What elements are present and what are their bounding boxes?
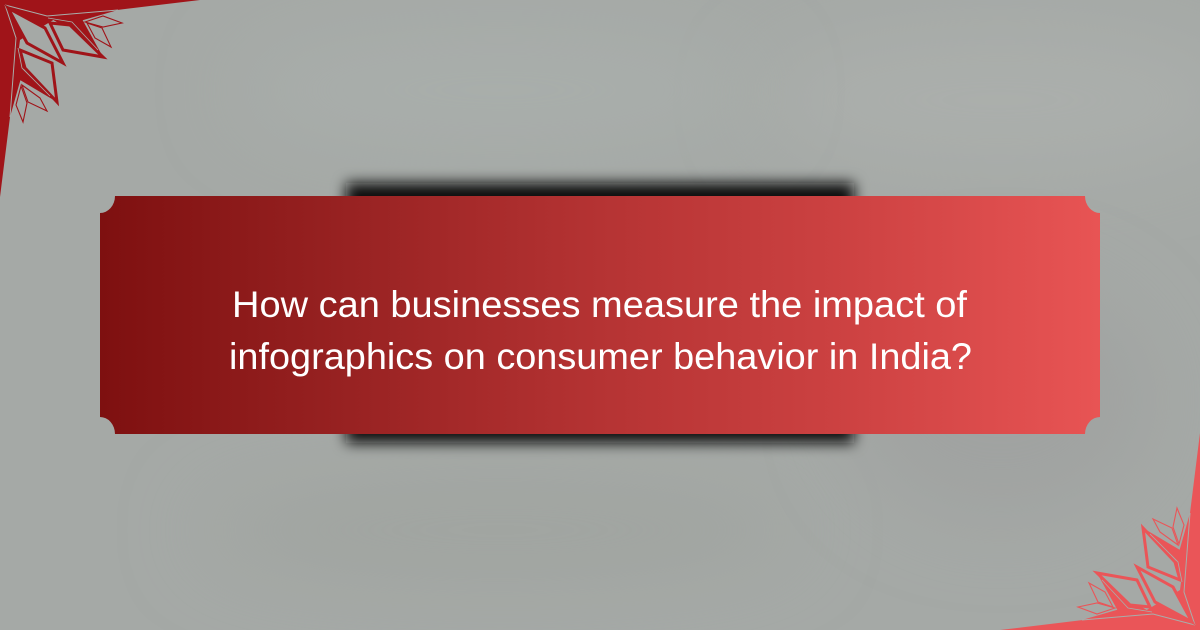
title banner [100,196,1100,434]
title: infographics on consumer behavior in India? [229,335,972,377]
banner panel with notched corners [100,196,1100,434]
corner ornament: top left [0,0,200,197]
banner shadow [346,183,854,443]
title: How can businesses measure the impact of [232,283,968,325]
corner ornament: bottom right [1000,433,1200,630]
title [229,283,972,377]
